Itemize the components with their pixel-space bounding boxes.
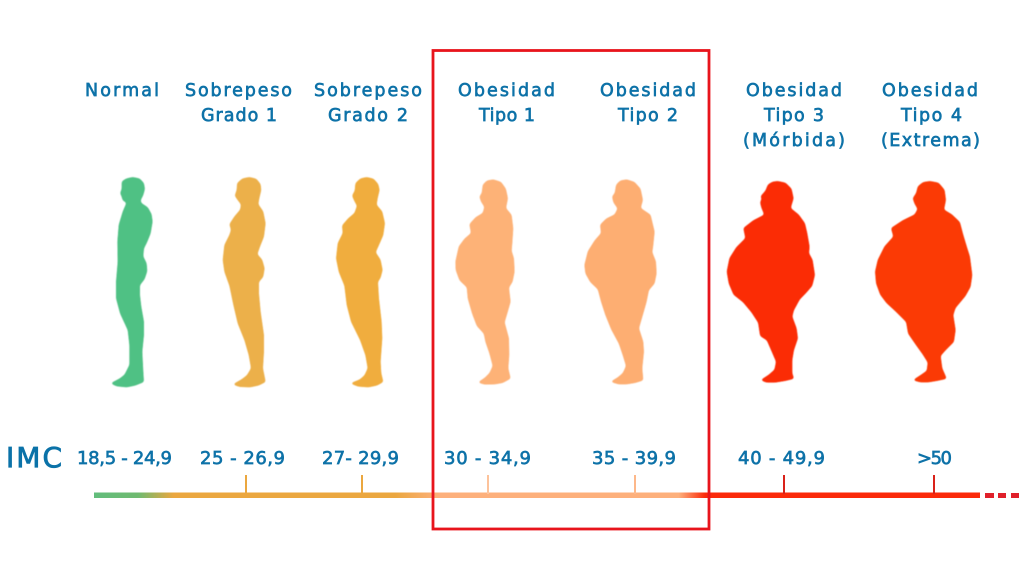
range: obesity 4: >50 — [917, 448, 952, 469]
heading: Sobrepeso Grado 1: Grado 1 — [201, 106, 277, 126]
range: obesity 2: 35 - 39,9 — [592, 448, 676, 469]
heading: Sobrepeso Grado 1: Sobrepeso — [185, 81, 292, 101]
icon: obesity type 1 silhouette — [456, 180, 514, 384]
range: obesity 1: 30 - 34,9 — [444, 448, 531, 469]
heading: Normal: Normal — [85, 81, 159, 101]
icon: obesity type 3 silhouette — [727, 182, 814, 382]
bar ticks — [246, 475, 934, 494]
heading: Obesidad Tipo 1 — [458, 81, 555, 126]
icon: obesity type 2 silhouette — [585, 180, 656, 384]
heading: Obesidad Tipo 4 (Extrema): (Extrema) — [881, 131, 980, 151]
highlight box around obesity types 1 and 2 — [433, 50, 709, 529]
heading: Sobrepeso Grado 2: Sobrepeso — [314, 81, 422, 101]
heading: Obesidad Tipo 2 — [600, 81, 696, 126]
dashed continuation — [985, 493, 1019, 498]
icon: obesity type 4 silhouette — [876, 182, 972, 382]
range: overweight 2: 27- 29,9 — [322, 448, 399, 469]
heading: Sobrepeso Grado 2: Grado 2 — [328, 106, 408, 126]
BMI scale bar — [94, 475, 1019, 498]
heading: Obesidad Tipo 3 (Mórbida): (Mórbida) — [743, 131, 845, 151]
BMI ranges — [77, 448, 952, 469]
heading: Obesidad Tipo 1: Obesidad — [458, 81, 555, 101]
heading: Obesidad Tipo 4 (Extrema): Tipo 4 — [900, 106, 962, 126]
icon: overweight grade 2 silhouette — [337, 178, 384, 387]
silhouettes: obesity type 1 and 2 — [456, 180, 656, 384]
category headings — [85, 81, 980, 151]
silhouettes: obesity type 3 and 4 — [727, 182, 972, 382]
range: obesity 3: 40 - 49,9 — [738, 448, 825, 469]
range: normal: 18,5 - 24,9 — [77, 448, 172, 469]
heading: Sobrepeso Grado 2 — [314, 81, 422, 126]
icon: overweight grade 1 silhouette — [223, 178, 265, 387]
heading: Obesidad Tipo 3 (Mórbida): Obesidad — [746, 81, 842, 101]
heading: Obesidad Tipo 3 (Mórbida) — [743, 81, 845, 151]
heading: Sobrepeso Grado 1 — [185, 81, 292, 126]
heading: Obesidad Tipo 2: Obesidad — [600, 81, 696, 101]
heading: Obesidad Tipo 4 (Extrema) — [881, 81, 980, 151]
range: overweight 1: 25 - 26,9 — [200, 448, 285, 469]
axis label: IMC: IMC — [6, 441, 62, 474]
heading: Obesidad Tipo 3 (Mórbida): Tipo 3 — [763, 106, 824, 126]
heading: Obesidad Tipo 2: Tipo 2 — [617, 106, 678, 126]
silhouettes: normal and overweight — [112, 178, 384, 387]
heading: Obesidad Tipo 1: Tipo 1 — [478, 106, 535, 126]
heading: Obesidad Tipo 4 (Extrema): Obesidad — [882, 81, 978, 101]
icon: normal body silhouette — [112, 178, 152, 387]
gradient bar — [94, 492, 980, 498]
